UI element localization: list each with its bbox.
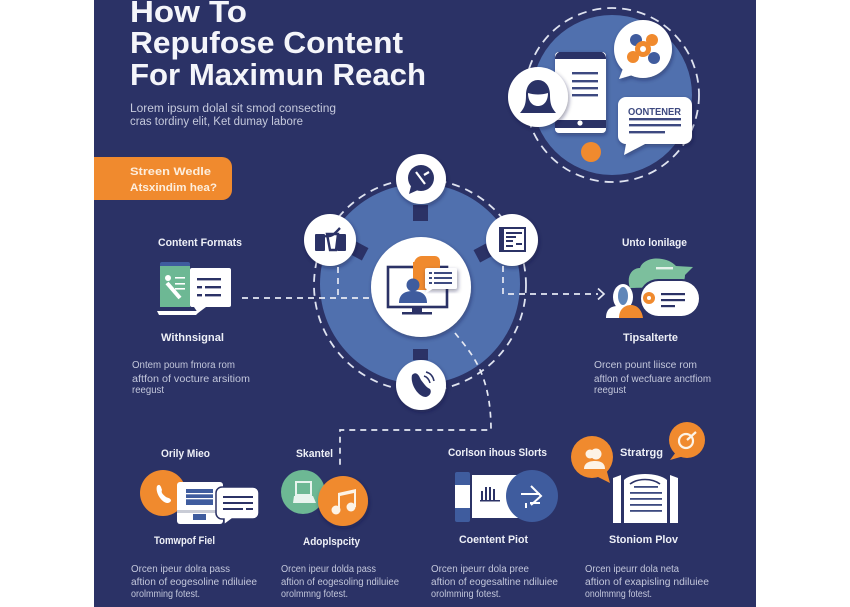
node icon: right document xyxy=(486,214,538,266)
callout: orange button: Atsxindim hea? xyxy=(130,182,217,194)
section: content pilot: Corlson ihous Slorts xyxy=(448,447,547,459)
section: content formats (left): aftfon of vocture arsitiom xyxy=(132,374,250,385)
node icon: left media xyxy=(304,214,356,266)
title: Repufose Content xyxy=(130,25,403,60)
section: unto lonilage (right): Tipsalterte xyxy=(623,332,678,344)
icon: avatar xyxy=(508,67,568,127)
section: strategy: onolmmng fotest. xyxy=(585,589,652,600)
subtitle text xyxy=(130,103,336,128)
icon: chart card with arrow xyxy=(455,470,558,522)
section: content pilot: Orcen ipeurr dola pree xyxy=(431,564,529,575)
section: unto lonilage (right): Unto lonilage xyxy=(622,237,687,249)
section: content pilot xyxy=(431,447,558,600)
icon: people bubble xyxy=(571,436,613,483)
diagram: central hub xyxy=(304,154,538,410)
node icon: top chat xyxy=(396,154,446,204)
section: skantel: Orcen ipeur dolda pass xyxy=(281,564,376,575)
connector tabs xyxy=(350,205,492,360)
section: skantel xyxy=(281,448,399,600)
center icon: monitor with person xyxy=(371,237,471,337)
icon: orange dot xyxy=(581,142,601,162)
section: content pilot: aftion of eogesaltine ndiluiee xyxy=(431,577,558,588)
icon: target bubble xyxy=(669,422,705,460)
illustration: top right social circle xyxy=(508,8,699,182)
section: unto lonilage (right): aftlon of wecfuare anctfiom xyxy=(594,374,711,385)
section: content formats (left): Ontem poum fmora rom xyxy=(132,360,235,371)
section: unto lonilage (right) xyxy=(594,237,711,396)
icon: content chat bubble: OONTENER xyxy=(628,106,681,118)
section: unto lonilage (right): Orcen pount liisce rom xyxy=(594,360,697,371)
icon: phone and document xyxy=(157,262,231,315)
section: content pilot: Coentent Piot xyxy=(459,534,528,546)
section: orily mieo: orolmming fotest. xyxy=(131,589,200,600)
section: content formats (left): reegust xyxy=(132,385,164,396)
icon: content chat bubble xyxy=(618,97,692,155)
section: content formats (left): Content Formats xyxy=(158,237,242,249)
connector lines xyxy=(242,266,604,465)
section: orily mieo: Orcen ipeur dolra pass xyxy=(131,564,230,575)
section: strategy: Orcen ipeurr dola neta xyxy=(585,564,679,575)
icon: phone xyxy=(555,52,606,133)
subtitle text: Lorem ipsum dolal sit smod consecting xyxy=(130,103,336,115)
icon: gear speech bubble xyxy=(614,20,672,79)
section: unto lonilage (right): reegust xyxy=(594,385,626,396)
callout: orange button xyxy=(94,157,232,200)
section: orily mieo: Orily Mieo xyxy=(161,448,210,460)
section: content formats (left) xyxy=(132,237,250,396)
section: skantel: Adoplspcity xyxy=(303,536,361,548)
icon: phone monitor chat xyxy=(140,470,259,525)
section: skantel: Skantel xyxy=(296,448,333,460)
title xyxy=(130,0,426,92)
callout: orange button: Streen Wedle xyxy=(130,166,211,178)
subtitle text: cras tordiny elit, Ket dumay labore xyxy=(130,116,303,128)
section: orily mieo xyxy=(131,448,259,600)
section: content pilot: orolmming fotest. xyxy=(431,589,501,600)
section: strategy: Stratrgg xyxy=(620,447,663,459)
icon: open book xyxy=(613,474,678,523)
section: skantel: aftion of eogesoling ndiluiee xyxy=(281,577,399,588)
node icon: bottom phone xyxy=(396,360,446,410)
section: strategy: aftion of exapisling ndiluiee xyxy=(585,577,709,588)
section: content formats (left): Withnsignal xyxy=(161,332,224,344)
section: orily mieo: aftion of eogesoline ndiluiee xyxy=(131,577,257,588)
section: strategy: Stoniom Plov xyxy=(609,534,679,546)
section: strategy xyxy=(571,422,709,600)
section: skantel: orolmmng fotest. xyxy=(281,589,348,600)
background panel xyxy=(94,0,756,607)
icon: laptop and music note xyxy=(281,470,368,526)
section: orily mieo: Tomwpof Fiel xyxy=(154,535,215,547)
icon: people and speech cloud xyxy=(606,258,701,318)
title: For Maximun Reach xyxy=(130,57,426,92)
